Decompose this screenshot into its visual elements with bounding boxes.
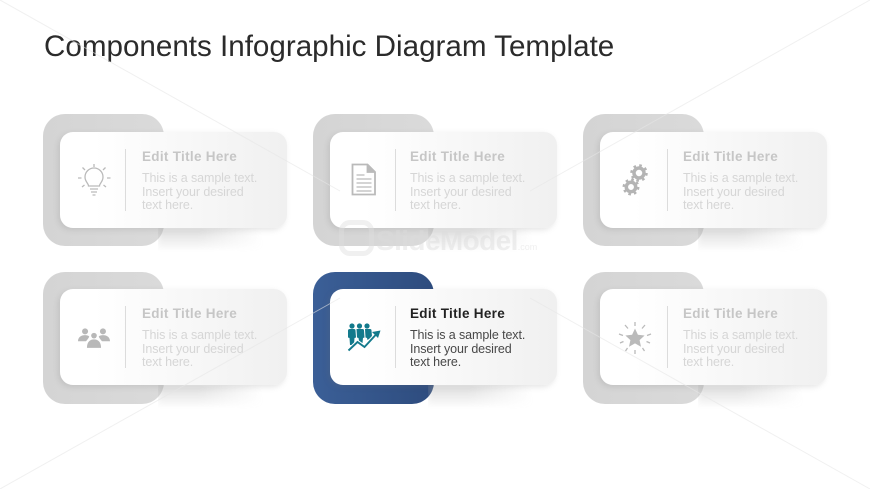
- text block: text here.: [410, 198, 461, 212]
- icon: team with rising arrow: [348, 323, 380, 352]
- text block: Insert your desired: [410, 342, 512, 356]
- text block: text here.: [683, 198, 734, 212]
- text block: This is a sample text.: [683, 171, 798, 185]
- heading: Edit Title Here: [683, 149, 778, 164]
- text block: Insert your desired: [142, 342, 244, 356]
- text block: Insert your desired: [683, 342, 785, 356]
- heading: Edit Title Here: [683, 306, 778, 321]
- panel: star: [583, 272, 827, 404]
- text block: This is a sample text.: [142, 328, 257, 342]
- text block: This is a sample text.: [410, 328, 525, 342]
- heading: Edit Title Here: [142, 149, 237, 164]
- heading: Edit Title Here: [142, 306, 237, 321]
- panel: settings: [583, 114, 827, 246]
- panel: growth (highlighted): [313, 272, 557, 404]
- icon: group of people: [78, 328, 110, 348]
- icon: light bulb: [78, 164, 110, 196]
- text block: This is a sample text.: [142, 171, 257, 185]
- panel: document: [313, 114, 557, 246]
- text block: [683, 328, 798, 369]
- panel: team: [43, 272, 287, 404]
- text block: [410, 171, 525, 212]
- heading: Edit Title Here: [410, 306, 505, 321]
- text block: text here.: [683, 355, 734, 369]
- text block: text here.: [142, 198, 193, 212]
- text block: [683, 171, 798, 212]
- text block: text here.: [142, 355, 193, 369]
- text block: [410, 328, 525, 369]
- text block: text here.: [410, 355, 461, 369]
- text block: Insert your desired: [410, 184, 512, 198]
- text block: This is a sample text.: [410, 171, 525, 185]
- icon: gears: [622, 164, 648, 196]
- text block: [142, 328, 257, 369]
- watermark: SlideModel.com: [376, 225, 537, 256]
- heading: Edit Title Here: [410, 149, 505, 164]
- text block: [142, 171, 257, 212]
- icon: shining star: [618, 322, 652, 354]
- text block: This is a sample text.: [683, 328, 798, 342]
- panel: idea: [43, 114, 287, 246]
- icon: document: [352, 164, 376, 196]
- text block: Insert your desired: [142, 184, 244, 198]
- text block: Insert your desired: [683, 184, 785, 198]
- title: Components Infographic Diagram Template: [44, 30, 614, 63]
